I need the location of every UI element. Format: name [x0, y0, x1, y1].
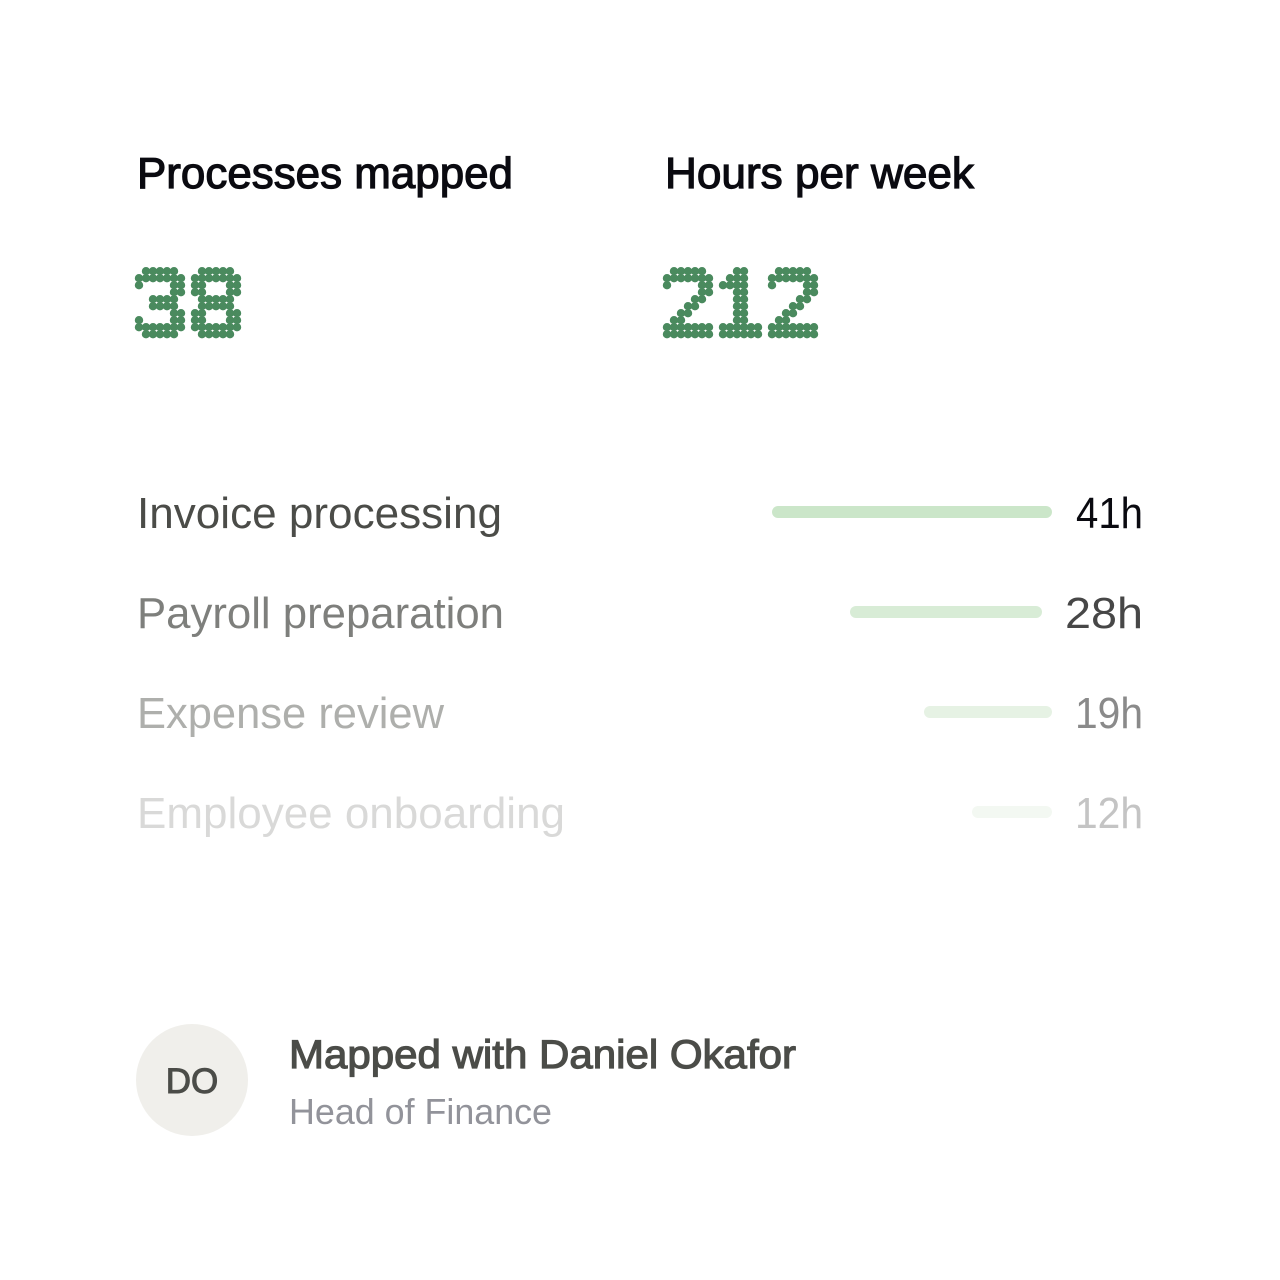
value: 12h	[1075, 789, 1143, 838]
label: Invoice processing	[137, 489, 502, 538]
heading: processes mapped: Processes mapped	[137, 149, 513, 198]
attribution	[136, 1024, 796, 1136]
bar	[850, 606, 1042, 618]
value: 19h	[1075, 689, 1143, 738]
bar	[772, 506, 1052, 518]
row: employee onboarding	[137, 789, 1143, 838]
bar	[924, 706, 1052, 718]
name: Mapped with Daniel Okafor	[289, 1033, 796, 1077]
value: 28h	[1065, 589, 1143, 638]
row: invoice processing	[137, 489, 1143, 538]
avatar: DO	[166, 1062, 218, 1101]
label: Expense review	[137, 689, 444, 738]
heading: hours per week: Hours per week	[665, 149, 975, 198]
label: Payroll preparation	[137, 589, 504, 638]
stat: processes mapped	[137, 149, 513, 354]
stat: hours per week	[665, 149, 975, 354]
value: 41h	[1076, 489, 1143, 538]
avatar	[136, 1024, 248, 1136]
row: payroll preparation	[137, 589, 1143, 638]
label: Employee onboarding	[137, 789, 565, 838]
bar	[972, 806, 1052, 818]
row: expense review	[137, 689, 1143, 738]
role: Head of Finance	[289, 1091, 552, 1132]
